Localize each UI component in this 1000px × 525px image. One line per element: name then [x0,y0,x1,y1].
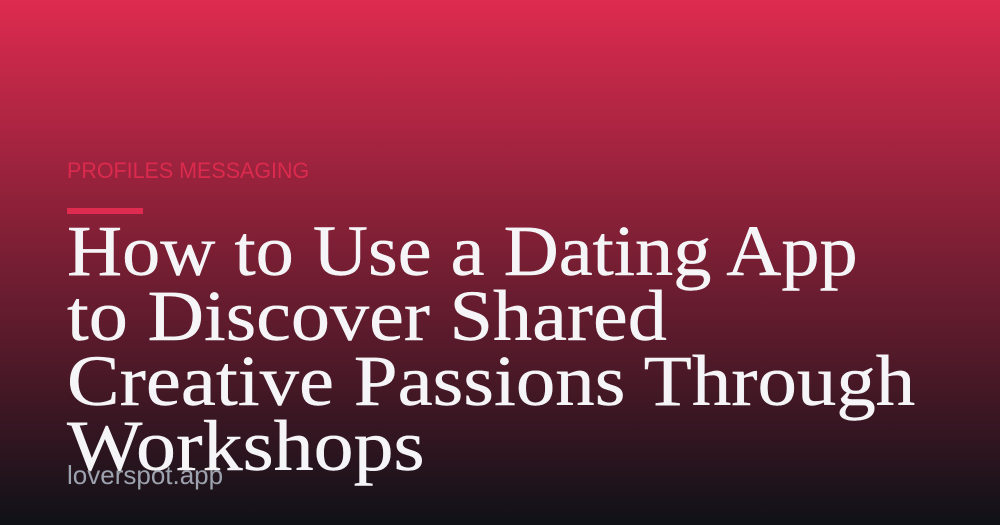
title: Workshops [67,406,425,486]
title [66,211,915,486]
title: to Discover Shared [67,276,667,356]
title: How to Use a Dating App [67,211,858,291]
site name: loverspot.app [67,460,223,490]
category label: PROFILES MESSAGING [67,158,309,183]
accent bar [67,208,143,214]
title: Creative Passions Through [67,341,915,421]
